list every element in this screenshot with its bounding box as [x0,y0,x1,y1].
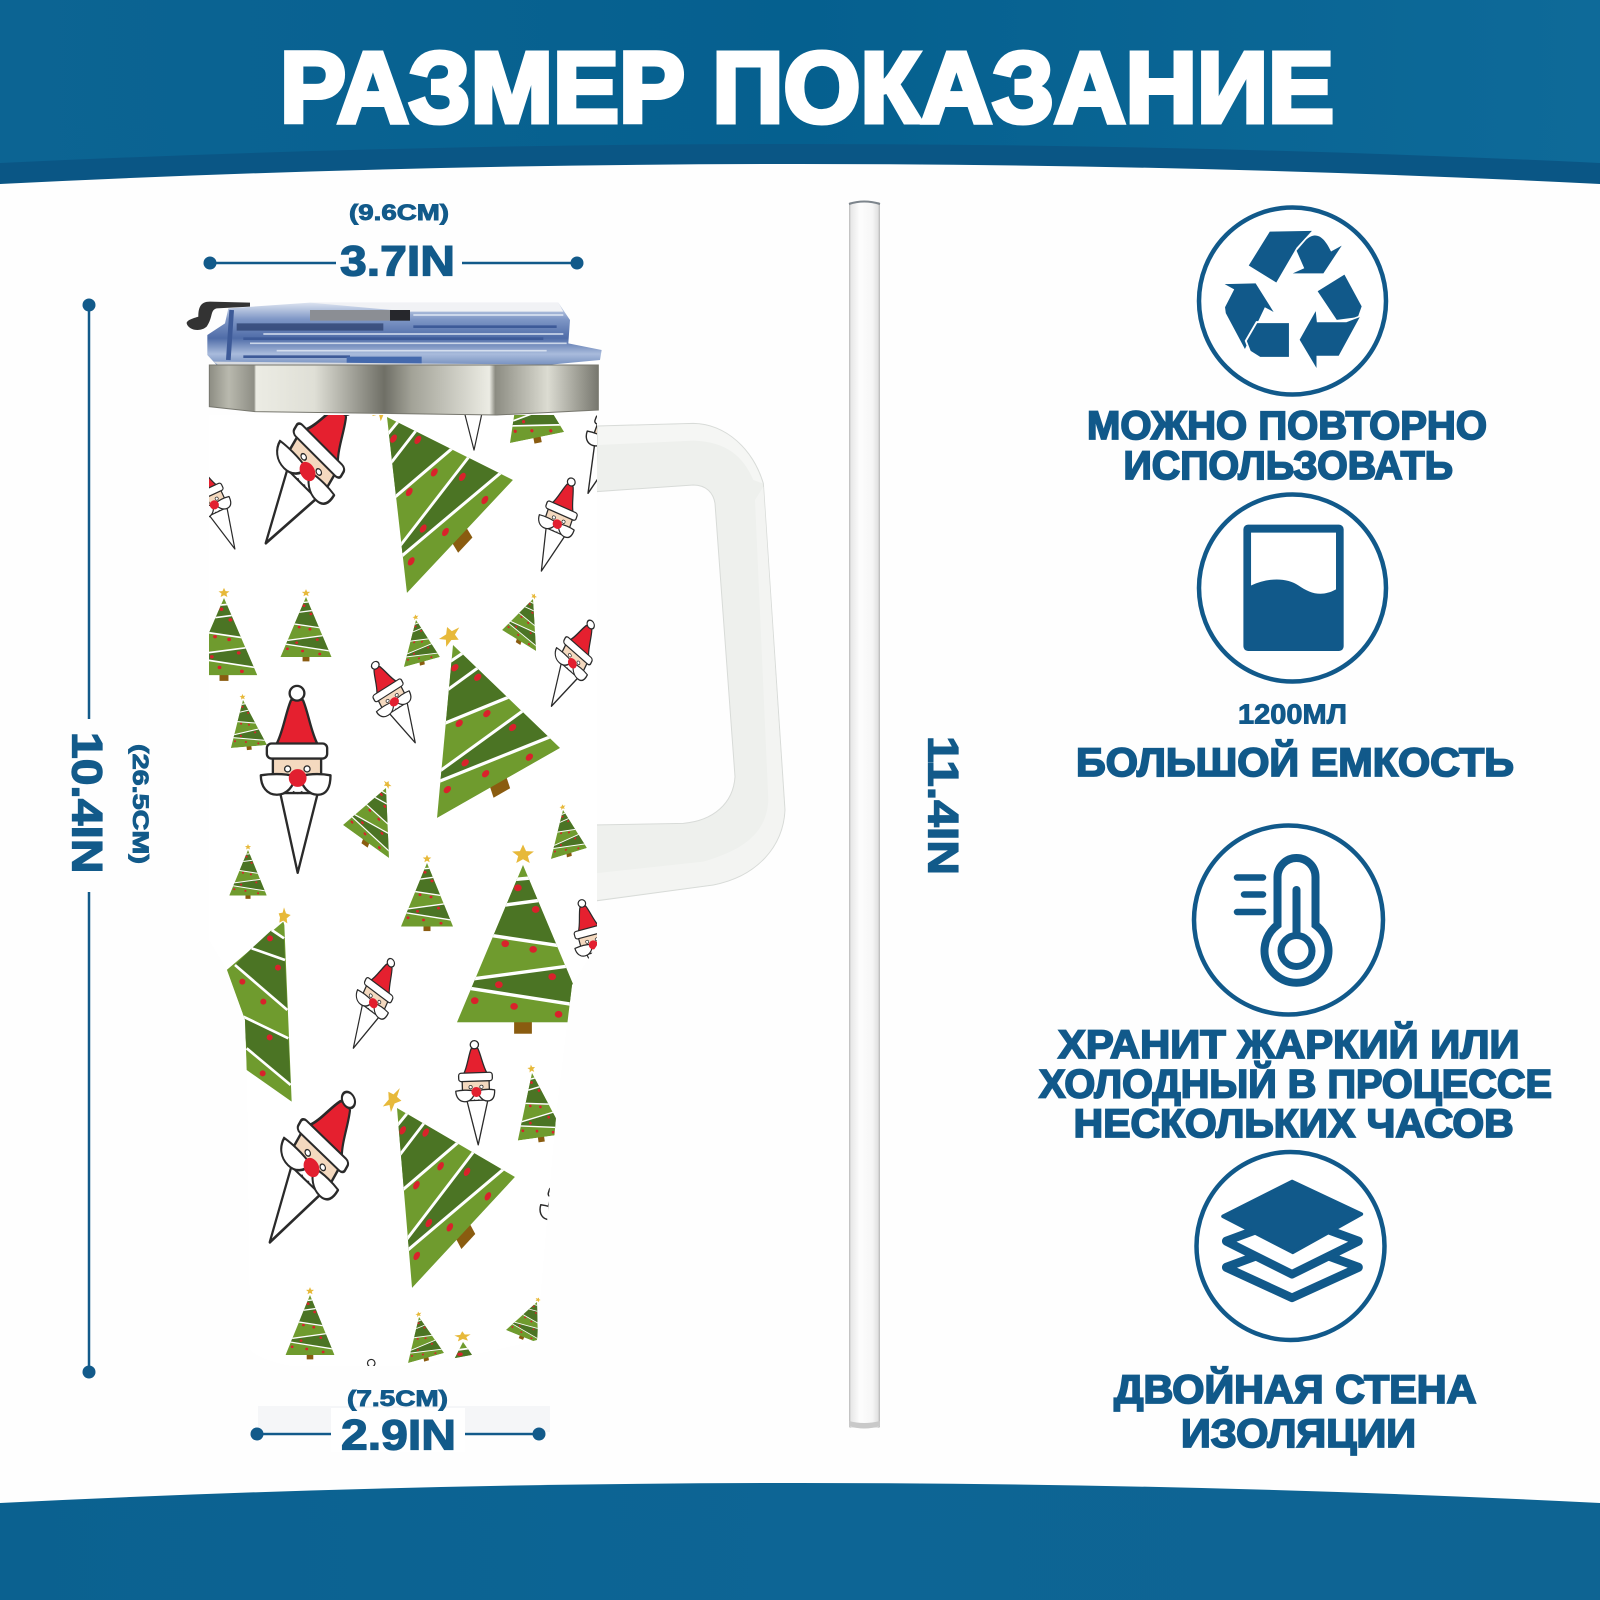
icon: layers [1196,1152,1384,1340]
dimension: top width [204,200,584,286]
icon: recycle [1199,208,1386,394]
feature: keeps temperature [1039,826,1552,1146]
icon: cup with liquid [1199,494,1386,682]
left cropped tree [227,907,292,1102]
label: keeps temperature line 2: ХОЛОДНЫЙ В ПРОЦЕССЕ [1039,1062,1552,1106]
label: keeps temperature line 3: НЕСКОЛЬКИХ ЧАСОВ [1074,1102,1514,1146]
handle [592,423,785,901]
label: 1200 ml: 1200МЛ [1238,698,1347,730]
faint rectangle behind bottom dimension [258,1406,550,1432]
bottom width centimetres: (7.5CM) [347,1386,448,1411]
title: РАЗМЕР ПОКАЗАНИЕ [280,32,1334,144]
metal rim [209,365,598,415]
footer banner [0,1483,1600,1600]
white label backing [331,1408,465,1452]
feature: large capacity [1076,494,1514,785]
straw length label: 11.4IN [918,736,966,875]
tumbler body [209,415,597,1366]
label: insulation: ИЗОЛЯЦИИ [1181,1412,1416,1456]
lid and metal rim [187,302,602,415]
label: large capacity: БОЛЬШОЙ ЕМКОСТЬ [1076,739,1514,785]
top width end dots [204,256,584,270]
dimension: height [62,298,153,1378]
header banner [0,0,1600,184]
top width measuring line [210,262,577,264]
lid highlights [213,303,598,368]
label: keeps temperature line 1: ХРАНИТ ЖАРКИЙ ИЛИ [1058,1022,1520,1067]
height centimetres: (26.5CM) [128,744,153,864]
feature: double wall insulation [1114,1152,1476,1456]
label: reusable line 2: ИСПОЛЬЗОВАТЬ [1124,444,1453,488]
straw [849,202,880,1428]
bottom width measuring line [257,1433,539,1435]
height inches: 10.4IN [62,732,110,874]
top width inches: 3.7IN [340,238,455,286]
clear blue lid [207,303,602,367]
latch [187,302,250,330]
bottom width inches: 2.9IN [341,1412,456,1460]
feature: reusable [1087,208,1487,488]
santas [209,362,597,1440]
bottom width end dots [250,1428,546,1440]
height measuring line [88,305,90,1372]
dimension: bottom width [250,1386,550,1460]
label: double wall: ДВОЙНАЯ СТЕНА [1114,1367,1476,1412]
tumbler [177,302,785,1456]
height end dots [82,298,96,1378]
trees [186,336,599,1435]
label: reusable line 1: МОЖНО ПОВТОРНО [1087,404,1487,448]
christmas pattern [209,362,597,1440]
icon: thermometer [1194,826,1383,1014]
top width centimetres: (9.6CM) [349,200,449,225]
